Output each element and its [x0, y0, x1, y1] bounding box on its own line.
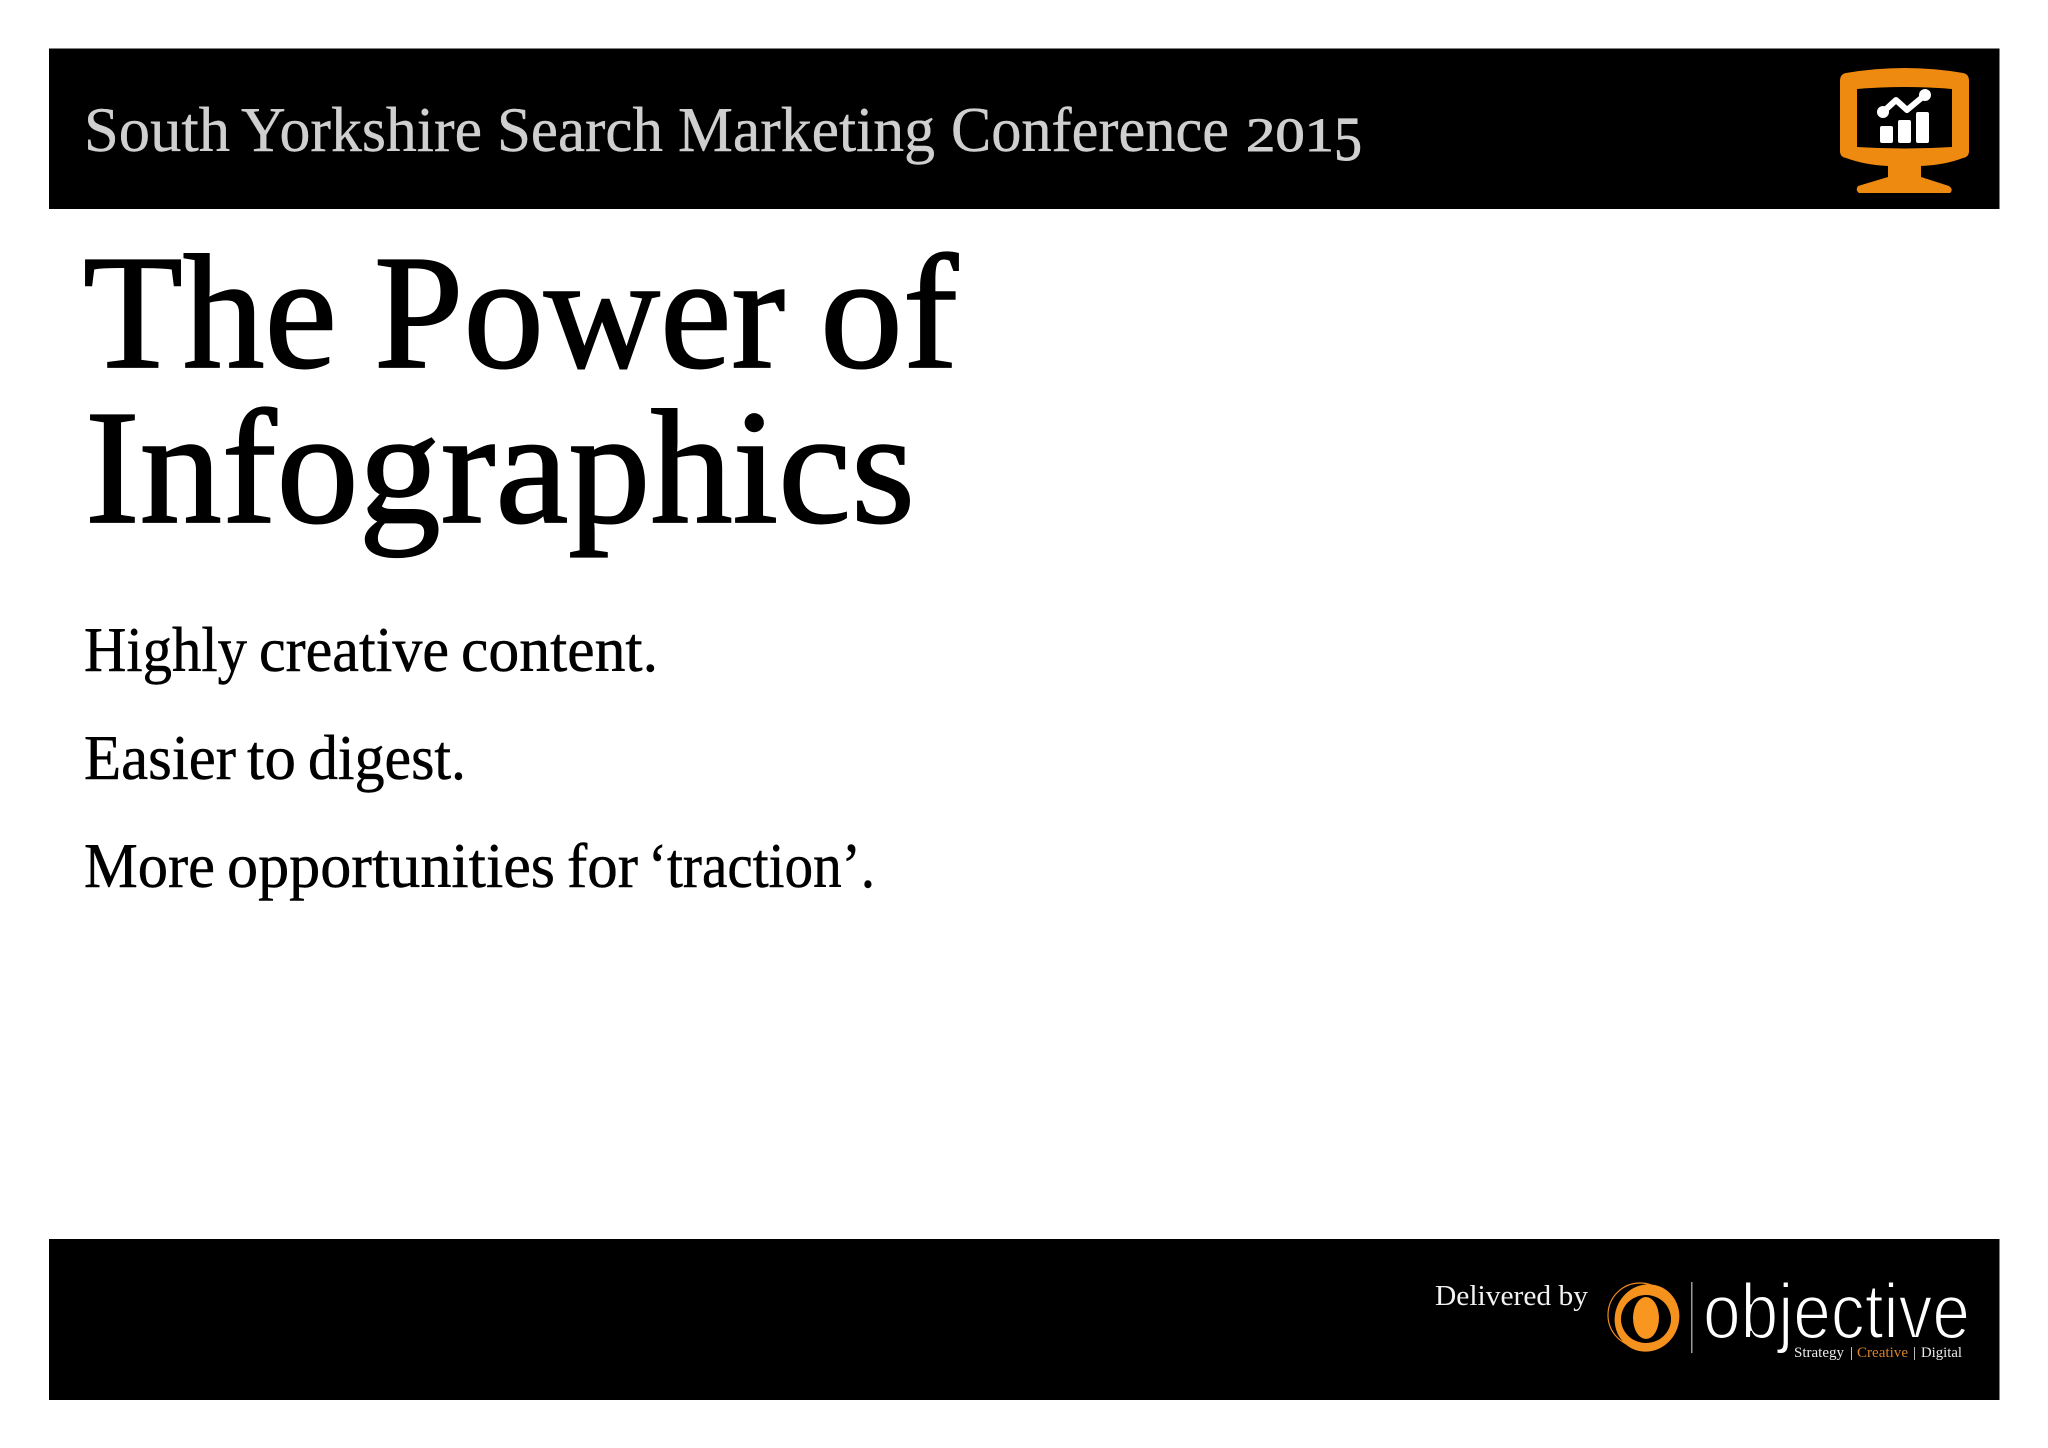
point: highly creative content: Highly [84, 615, 247, 685]
key points [84, 615, 875, 901]
logo: objective: Strategy [1794, 1345, 1844, 1361]
logo: objective: | [1913, 1345, 1916, 1361]
point: highly creative content [84, 615, 658, 685]
point: highly creative content: creative [259, 615, 449, 685]
point: more opportunities for traction: for [567, 831, 638, 901]
point: more opportunities for traction: ‘traction’. [648, 831, 875, 901]
point: easier to digest [84, 723, 466, 793]
conference name [84, 94, 1362, 174]
logo: objective: objective [1703, 1267, 1970, 1355]
title: of [820, 223, 959, 403]
point: more opportunities for traction: opportunities [227, 831, 555, 901]
point: more opportunities for traction: More [84, 831, 215, 901]
logo: objective: | [1850, 1345, 1853, 1361]
conference name: Conference [951, 94, 1229, 165]
point: easier to digest: digest. [308, 723, 466, 793]
point: easier to digest: Easier [84, 723, 236, 793]
title: The [83, 223, 337, 403]
logo: objective [1604, 1267, 1970, 1362]
title: Infographics [85, 378, 915, 558]
conference name: Marketing [678, 94, 935, 165]
title [83, 223, 959, 558]
logo: objective: Digital [1921, 1345, 1962, 1361]
title: Power [374, 223, 785, 403]
conference name: South [84, 94, 230, 165]
delivered by label: Delivered by [1435, 1280, 1588, 1312]
footer band [49, 1239, 2000, 1400]
conference name: 201 [1246, 109, 1334, 162]
header band [49, 48, 2000, 209]
conference name: Search [497, 94, 663, 165]
icon: monitor with chart [1840, 68, 1969, 193]
conference name: 5 [1334, 106, 1362, 174]
logo: objective: Creative [1857, 1345, 1908, 1361]
point: more opportunities for traction [84, 831, 875, 901]
point: easier to digest: to [247, 723, 296, 793]
conference name: Yorkshire [241, 94, 482, 165]
point: highly creative content: content. [461, 615, 658, 685]
